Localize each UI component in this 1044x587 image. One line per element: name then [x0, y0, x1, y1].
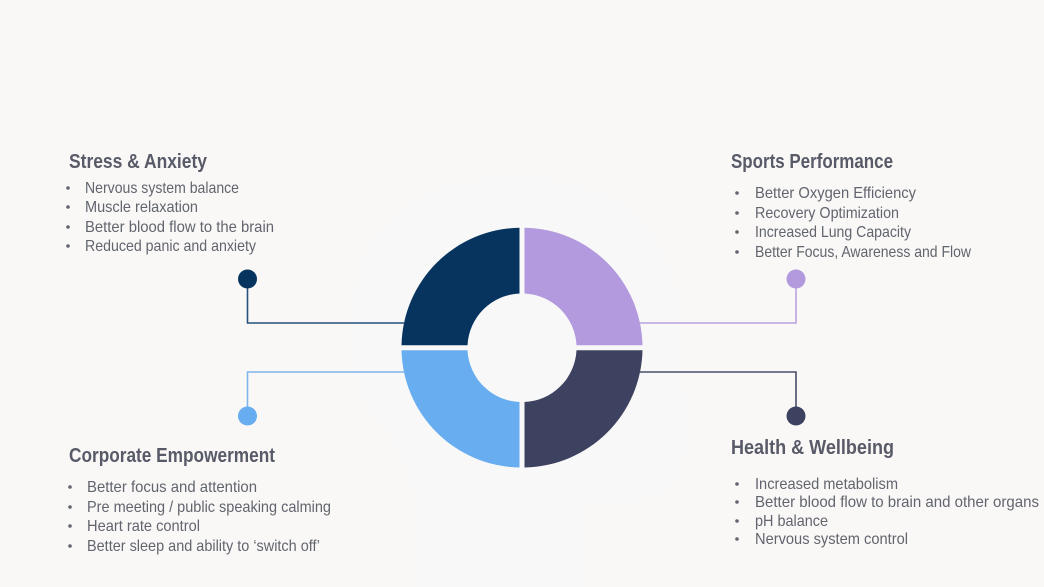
heading: sports performance: Sports Performance — [731, 151, 893, 173]
text block: health and wellbeing — [731, 437, 1039, 548]
list: health and wellbeing: Increased metabolism — [755, 476, 898, 493]
segment: sports performance — [524, 228, 642, 345]
list: stress and anxiety: Better blood flow to the brain — [85, 219, 274, 236]
text block: corporate empowerment — [68, 445, 331, 555]
list: sports performance: Better Oxygen Efficiency — [755, 185, 916, 202]
list: corporate empowerment — [68, 479, 331, 555]
list: sports performance — [735, 185, 971, 261]
list: corporate empowerment: Better sleep and ability to ‘switch off’ — [87, 538, 320, 555]
list: health and wellbeing — [735, 476, 1039, 548]
segment: corporate empowerment — [402, 350, 520, 468]
list: sports performance: Better Focus, Awareness and Flow — [755, 244, 971, 261]
text block: stress and anxiety — [66, 151, 274, 255]
list: sports performance: Recovery Optimization — [755, 205, 899, 222]
segment: stress and anxiety — [402, 228, 520, 345]
list: stress and anxiety: Nervous system balance — [85, 180, 239, 197]
donut chart — [402, 228, 642, 468]
list: corporate empowerment: Heart rate control — [87, 518, 200, 535]
list: stress and anxiety — [66, 180, 274, 255]
connector: stress and anxiety — [238, 270, 404, 323]
connector: sports performance — [640, 270, 806, 323]
list: corporate empowerment: Better focus and attention — [87, 479, 257, 496]
connector: health and wellbeing — [640, 372, 806, 426]
heading: corporate empowerment: Corporate Empowerment — [69, 445, 275, 467]
text block: sports performance — [731, 151, 971, 261]
list: stress and anxiety: Muscle relaxation — [85, 199, 198, 216]
list: stress and anxiety: Reduced panic and anxiety — [85, 238, 256, 255]
connector: corporate empowerment — [238, 372, 404, 426]
segment: health and wellbeing — [524, 350, 642, 468]
list: health and wellbeing: pH balance — [755, 513, 828, 530]
heading: stress and anxiety: Stress & Anxiety — [69, 151, 208, 173]
list: health and wellbeing: Nervous system control — [755, 531, 908, 548]
list: sports performance: Increased Lung Capacity — [755, 224, 911, 241]
head silhouette watermark — [352, 178, 686, 587]
list: corporate empowerment: Pre meeting / public speaking calming — [87, 499, 331, 516]
heading: health and wellbeing: Health & Wellbeing — [731, 437, 894, 459]
